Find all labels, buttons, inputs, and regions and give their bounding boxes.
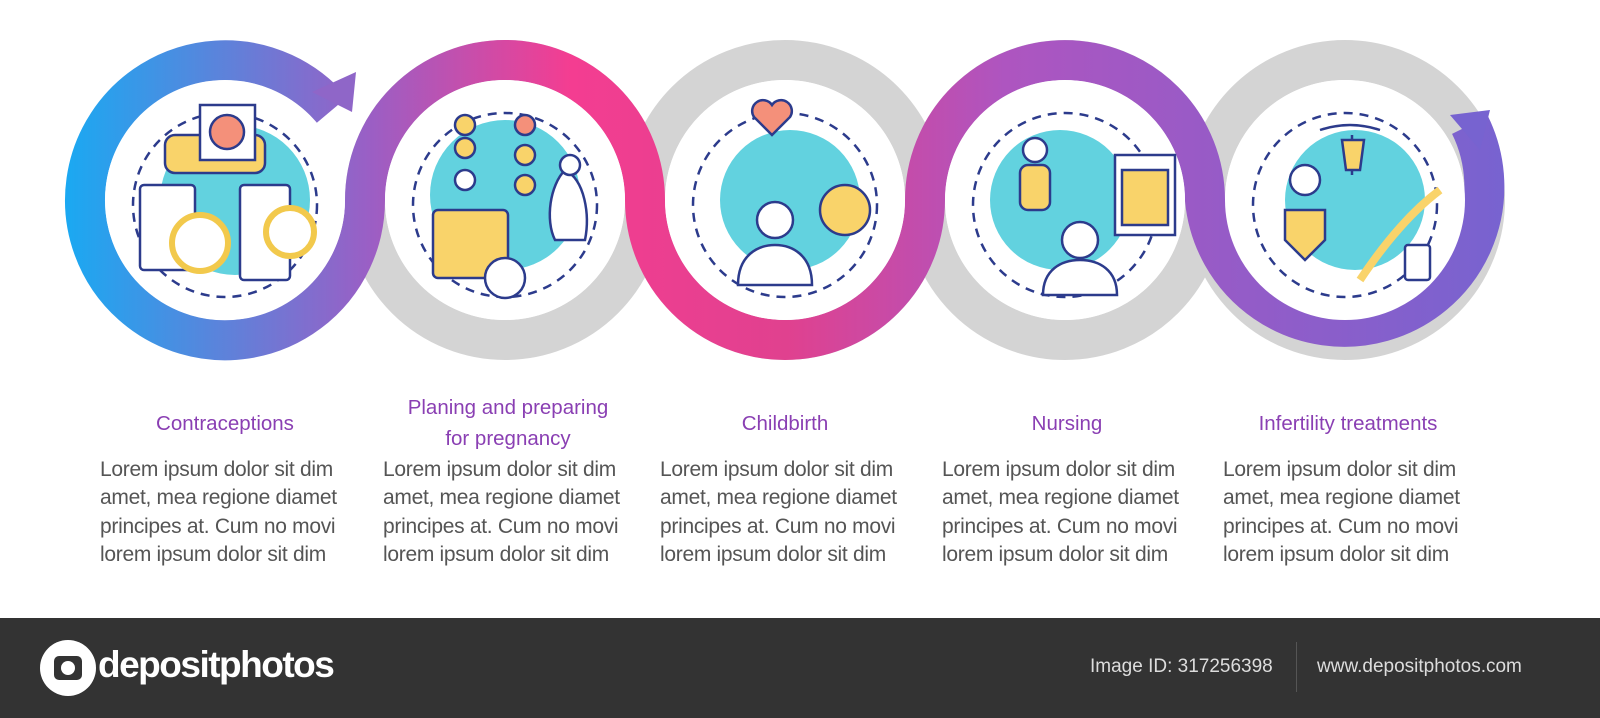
colored path [85,60,1490,340]
gray rings [365,60,1485,340]
column 4 text: principes at. Cum no movi [942,515,1177,538]
column 3 text: amet, mea regione diamet [660,486,897,509]
column 4 text: Nursing [1032,412,1102,434]
title: Contraceptions [156,412,294,434]
column 2 text: principes at. Cum no movi [383,515,618,538]
column 2 text [383,396,620,566]
icon: planning [413,113,597,298]
column 1 text: principes at. Cum no movi [100,515,335,538]
image id: Image ID: 317256398 [1090,656,1273,677]
column 4 text: amet, mea regione diamet [942,486,1179,509]
column 3 text: principes at. Cum no movi [660,515,895,538]
column 3 text: Childbirth [742,412,828,434]
column 1 text: Lorem ipsum dolor sit dim [100,458,333,481]
logo [40,640,96,696]
column 5 text: amet, mea regione diamet [1223,486,1460,509]
column 1 text: amet, mea regione diamet [100,486,337,509]
icon: childbirth [693,100,877,297]
icon: contraceptions [133,105,317,297]
column 3 text: lorem ipsum dolor sit dim [660,543,886,566]
footer bar: depositphotos [98,644,333,685]
column 4 text: Lorem ipsum dolor sit dim [942,458,1175,481]
column 3 text: Lorem ipsum dolor sit dim [660,458,893,481]
column 1 text: lorem ipsum dolor sit dim [100,543,326,566]
column 1 text [100,412,337,566]
column 2 text: Lorem ipsum dolor sit dim [383,458,616,481]
column 3 text [660,412,897,566]
column 4 text [942,412,1179,566]
column 2 text: lorem ipsum dolor sit dim [383,543,609,566]
inner white circles [105,80,1465,320]
column 2 text: Planing and preparing [408,396,608,419]
column 4 text: lorem ipsum dolor sit dim [942,543,1168,566]
icon: infertility [1253,113,1440,297]
column 5 text: lorem ipsum dolor sit dim [1223,543,1449,566]
column 5 text [1223,412,1460,566]
column 2 text: amet, mea regione diamet [383,486,620,509]
column 2 text: for pregnancy [445,427,571,450]
footer bar: www.depositphotos.com [1317,656,1522,677]
column 5 text: Infertility treatments [1259,412,1437,434]
column 5 text: principes at. Cum no movi [1223,515,1458,538]
diagram: snake of circles [64,40,1505,360]
icon: nursing [973,113,1175,297]
column 5 text: Lorem ipsum dolor sit dim [1223,458,1456,481]
footer bar [0,618,1600,718]
